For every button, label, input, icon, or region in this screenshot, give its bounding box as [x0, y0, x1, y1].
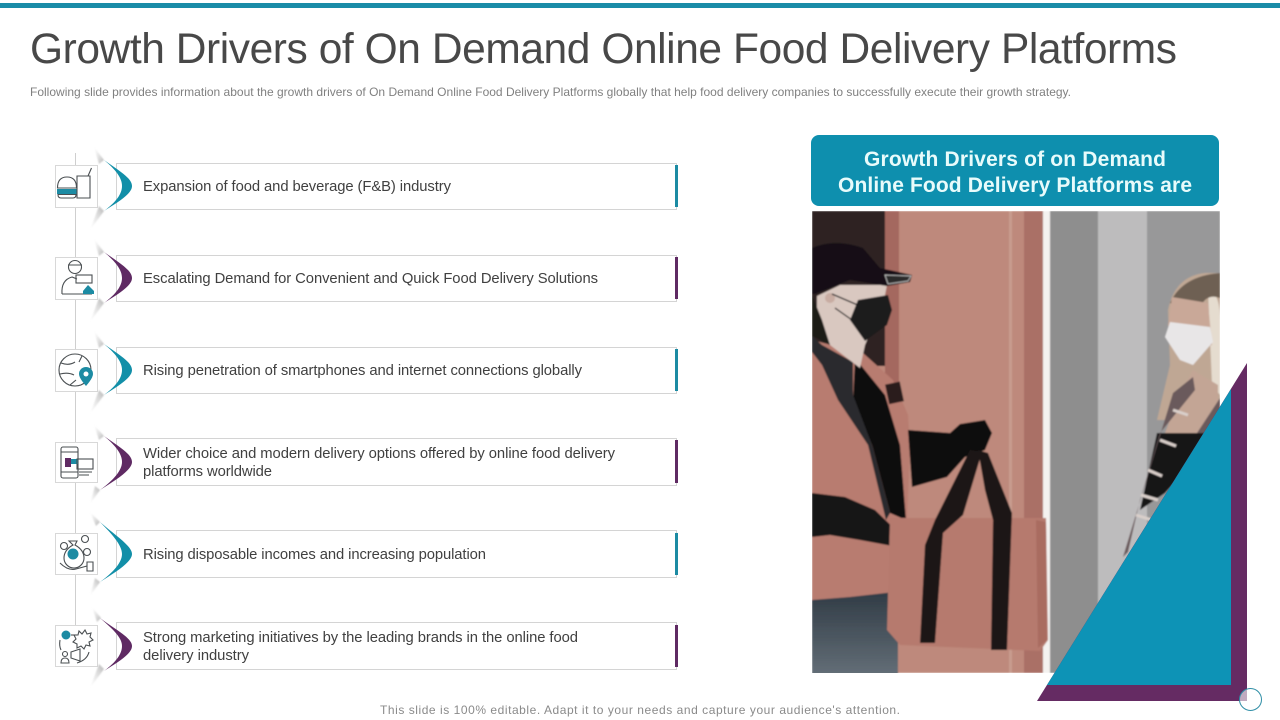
heading panel: Online Food Delivery Platforms are [838, 174, 1192, 197]
text box 2 [116, 256, 676, 302]
driver row 4 [56, 425, 678, 504]
decorative corner triangle: purple [1037, 363, 1247, 701]
customer hair [1157, 273, 1220, 420]
courier neck and face [817, 285, 887, 368]
driver text 2: Escalating Demand for Convenient and Quick Food Delivery Solutions [143, 271, 598, 287]
title: Growth Drivers of On Demand Online Food Delivery Platforms [30, 26, 1177, 73]
courier mask [850, 295, 892, 341]
heading panel: Growth Drivers of on Demand [864, 148, 1166, 171]
customer top and plaid shirt [1140, 432, 1204, 510]
heading panel [811, 135, 1219, 206]
icon box: money in hand [56, 534, 98, 574]
top accent bar [0, 3, 1280, 8]
accent bar 6 [675, 625, 678, 667]
chevron 4 [90, 425, 132, 504]
decorative corner triangle: teal [1047, 389, 1231, 685]
driver row 5 [56, 512, 678, 596]
driver row 3 [56, 331, 678, 414]
icon box: burger and drink [56, 166, 98, 208]
icon box: marketing megaphone [56, 626, 98, 666]
driver text 6 [143, 630, 578, 664]
chevron 3 [90, 331, 132, 414]
icon box: delivery person [56, 258, 98, 300]
accent bar 2 [675, 257, 678, 299]
delivery bag [887, 518, 1048, 651]
chevron 1 [90, 147, 132, 230]
courier cap [812, 243, 912, 294]
icon box: globe with pin [56, 350, 98, 392]
driver text 1: Expansion of food and beverage (F&B) industry [143, 179, 452, 195]
driver text 4 [143, 446, 616, 480]
courier jeans [812, 590, 898, 680]
icon box: phone and card [56, 442, 98, 482]
timeline vertical line [75, 153, 76, 628]
customer chest [1164, 381, 1218, 434]
customer mask [1165, 322, 1213, 365]
photo: courier handing delivery bag to customer [812, 211, 1220, 680]
driver text 5: Rising disposable incomes and increasing population [143, 547, 486, 563]
driver row 2 [56, 239, 678, 322]
accent bar 5 [675, 533, 678, 575]
driver row 6 [56, 607, 678, 688]
accent bar 4 [675, 440, 678, 483]
text box 4 [116, 438, 676, 486]
driver text 4: platforms worldwide [143, 464, 272, 480]
chevron 5 [90, 512, 132, 596]
text box 6 [116, 622, 676, 670]
courier jacket [812, 340, 910, 600]
chevron 2 [90, 239, 132, 322]
driver text 4: Wider choice and modern delivery options offered by online food delivery [143, 446, 616, 462]
driver row 1 [56, 147, 678, 230]
driver text 6: delivery industry [143, 648, 250, 664]
text box 5 [116, 530, 676, 578]
driver text 6: Strong marketing initiatives by the leading brands in the online food [143, 630, 578, 646]
driver text 3: Rising penetration of smartphones and internet connections globally [143, 363, 583, 379]
accent bar 1 [675, 165, 678, 207]
page marker circle [1240, 688, 1262, 710]
subtitle: Following slide provides information about the growth drivers of On Demand Online Food Delivery Platforms globally that help food delivery companies to successfully execute their growth strategy. [30, 85, 1071, 99]
accent bar 3 [675, 349, 678, 391]
courier arm and glove [908, 420, 992, 487]
footer note: This slide is 100% editable. Adapt it to your needs and capture your audience's attention. [380, 703, 900, 717]
text box 3 [116, 348, 676, 394]
customer face [1168, 297, 1212, 350]
text box 1 [116, 164, 676, 210]
chevron 6 [90, 607, 132, 688]
